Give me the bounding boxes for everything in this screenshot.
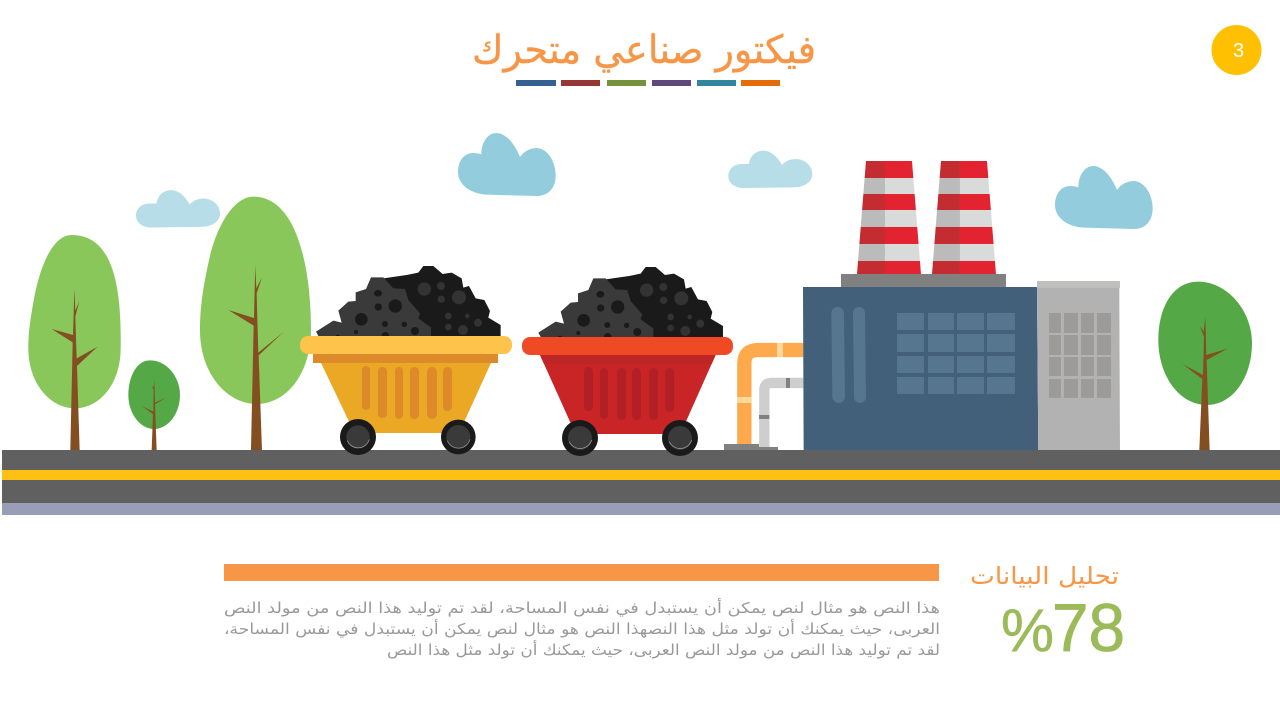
body text: العربى، حيث يمكنك أن تولد مثل هذا النصهذا النص هو مثال لنص يمكن أن يستبدل في نفس المساحة، (224, 619, 940, 639)
chimney: right (928, 161, 998, 274)
orange header bar (224, 564, 939, 581)
factory (724, 161, 1120, 450)
cloud: dark right (1055, 166, 1153, 229)
percentage: 78 (1052, 590, 1125, 666)
coal pile: yellow cart (316, 266, 501, 339)
cloud: dark centre (458, 133, 556, 196)
body text: هذا النص هو مثال لنص يمكن أن يستبدل في نفس المساحة، لقد تم توليد هذا النص من مولد النص (224, 598, 940, 618)
side building (1037, 281, 1120, 450)
tree: tall (200, 197, 311, 450)
pipe: orange (737, 343, 803, 445)
data analysis heading: تحليل البيانات (970, 562, 1119, 590)
mine cart: yellow (300, 266, 512, 455)
road (2, 450, 1280, 515)
cloud: light left (136, 190, 220, 227)
title colour bars (516, 80, 780, 86)
chimney: left (853, 161, 923, 274)
tree: small (128, 360, 180, 450)
mine cart: red (522, 267, 733, 456)
percentage: % (1001, 597, 1054, 664)
cloud: light centre-right (728, 151, 812, 188)
coal pile: red cart (538, 267, 723, 340)
page number badge (1212, 25, 1262, 75)
pipe base (724, 444, 778, 450)
body text: لقد تم توليد هذا النص من مولد النص العربى، حيث يمكنك أن تولد مثل هذا النص (387, 640, 940, 659)
title: فيكتور صناعي متحرك (472, 28, 816, 73)
page number badge: 3 (1233, 40, 1244, 62)
percentage (1001, 590, 1125, 666)
tree: left (28, 235, 121, 450)
main building (803, 287, 1038, 450)
tree: right (1158, 282, 1252, 450)
pipe: grey (759, 378, 803, 447)
body text (224, 598, 940, 659)
